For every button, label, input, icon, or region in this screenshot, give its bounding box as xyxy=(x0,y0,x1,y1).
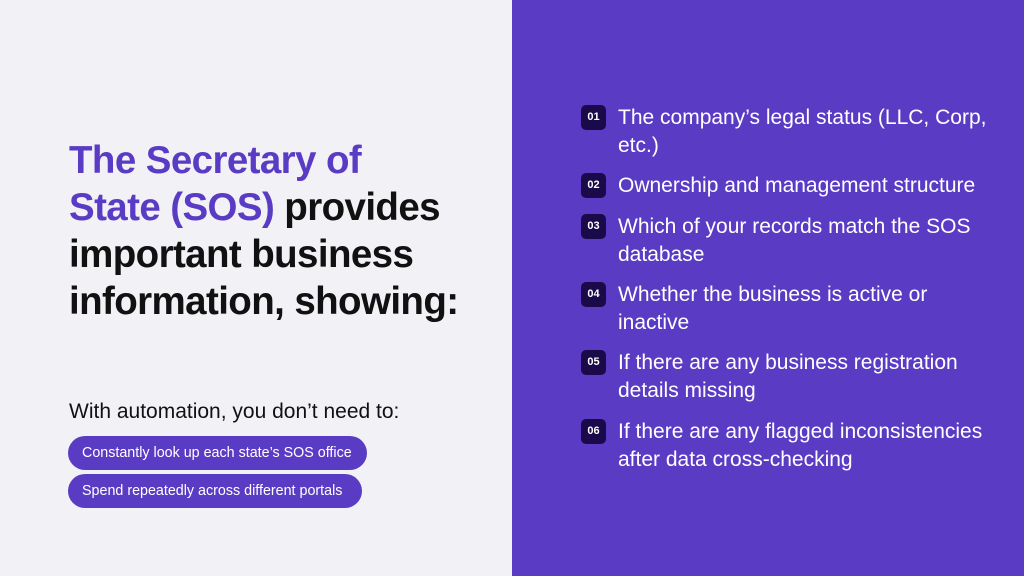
text: details missing xyxy=(618,379,756,402)
pill: spend xyxy=(68,474,362,508)
title: important business xyxy=(69,233,413,276)
text: Ownership and management structure xyxy=(618,174,975,197)
text: The company’s legal status (LLC, Corp, xyxy=(618,106,986,129)
text: database xyxy=(618,243,704,266)
item 05 xyxy=(581,350,958,402)
pill: look up xyxy=(68,436,367,470)
pill: spend: Spend repeatedly across different portals xyxy=(82,483,342,499)
text: Which of your records match the SOS xyxy=(618,215,970,238)
text: Whether the business is active or xyxy=(618,283,927,306)
title: State (SOS) provides xyxy=(69,186,440,229)
text: etc.) xyxy=(618,134,659,157)
title xyxy=(69,139,458,323)
text: If there are any flagged inconsistencies xyxy=(618,420,982,443)
text: 02 xyxy=(587,179,600,191)
text: 04 xyxy=(587,288,600,300)
text: after data cross-checking xyxy=(618,448,853,471)
item 03 xyxy=(581,214,970,266)
text: 06 xyxy=(587,425,600,437)
subheading: With automation, you don’t need to: xyxy=(69,400,399,423)
text: 05 xyxy=(587,356,600,368)
text: 01 xyxy=(587,111,600,123)
text: 03 xyxy=(587,220,600,232)
pill: look up: Constantly look up each state’s SOS office xyxy=(82,445,352,461)
text: inactive xyxy=(618,311,689,334)
item 04 xyxy=(581,282,928,334)
panel: right purple xyxy=(512,0,1024,576)
item 06 xyxy=(581,419,982,471)
title: The Secretary of xyxy=(69,139,361,182)
title: information, showing: xyxy=(69,280,458,323)
text: If there are any business registration xyxy=(618,351,958,374)
item 01 xyxy=(581,105,986,157)
item 02 xyxy=(581,173,975,198)
